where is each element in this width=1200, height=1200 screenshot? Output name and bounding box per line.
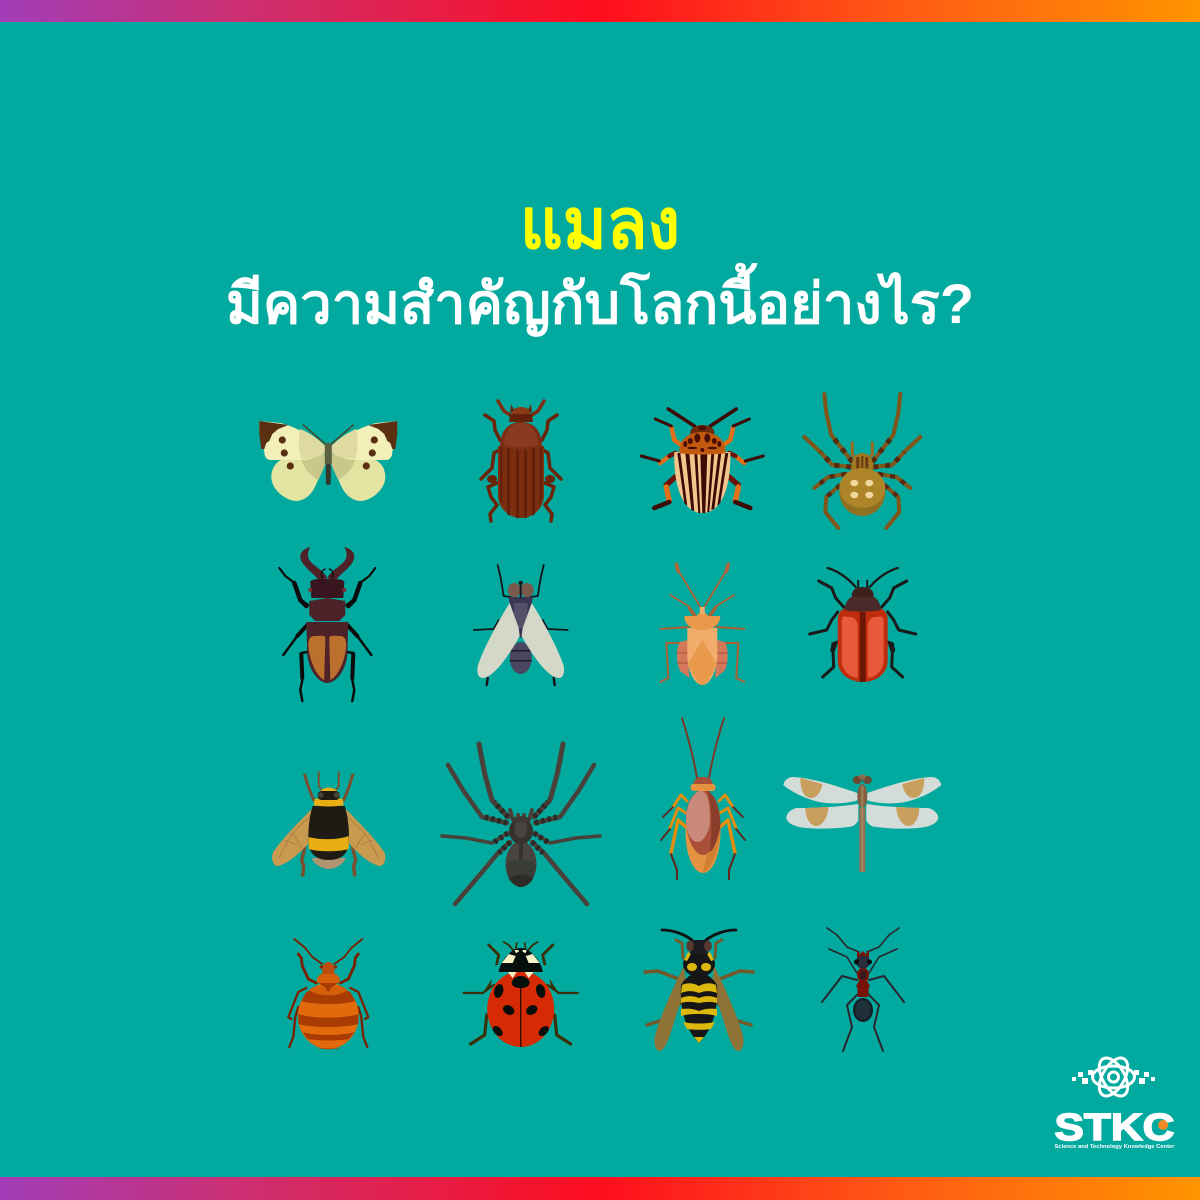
logo orange dot [1158, 1120, 1168, 1130]
top gradient bar [0, 0, 1200, 22]
icon: squash bug [660, 562, 744, 685]
icon: colorado potato beetle [641, 409, 763, 513]
logo tagline: Science and Technology Knowledge Center [1054, 1144, 1175, 1150]
icon: dragonfly [783, 774, 941, 872]
icon: fly [474, 565, 568, 685]
logo wordmark: STKC [1054, 1107, 1174, 1149]
icon: cockroach [661, 718, 745, 879]
icon: orb spider [804, 394, 920, 528]
icon: wolf spider [442, 744, 600, 904]
icon: red leaf beetle [810, 568, 916, 682]
logo: STKC [1054, 1053, 1175, 1150]
icon: wasp [645, 930, 753, 1051]
icon: ladybug [464, 942, 578, 1047]
title [226, 185, 974, 337]
icon: butterfly [259, 421, 397, 501]
icon: bed bug [288, 939, 368, 1049]
heading: insects: แมลง [520, 185, 680, 263]
subheading: มีความสำคัญกับโลกนี้อย่างไร? [226, 263, 974, 337]
bottom gradient bar [0, 1177, 1200, 1200]
icon: stag beetle [279, 547, 375, 701]
icon: atom [1092, 1053, 1134, 1101]
icon: ant [822, 928, 904, 1051]
icon: brown beetle [481, 401, 561, 521]
icon: bumblebee [272, 772, 385, 875]
icon: data pixels [1072, 1070, 1155, 1084]
